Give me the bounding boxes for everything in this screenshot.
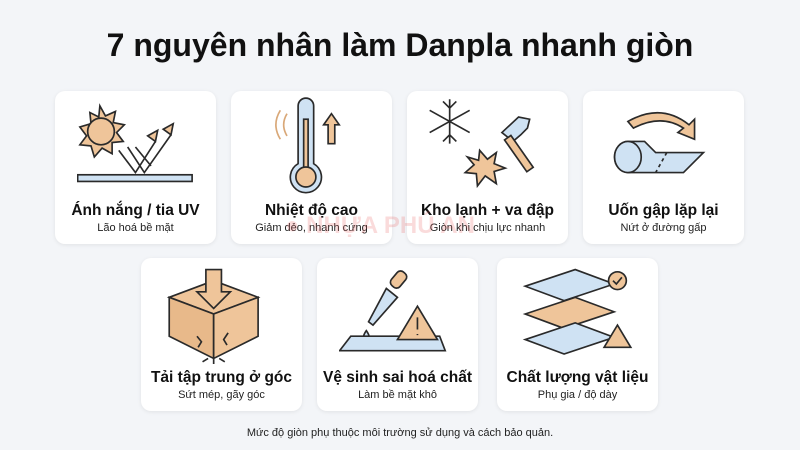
panel: chemicals xyxy=(317,258,478,411)
panel: folding: Nứt ở đường gấp xyxy=(620,222,707,234)
icon: folded sheet xyxy=(614,112,706,174)
panel: cold impact: Kho lạnh + va đập xyxy=(421,202,554,219)
panel: UV: Lão hoá bề mặt xyxy=(97,222,174,234)
panel: material xyxy=(497,258,658,411)
panel: heat: Giảm dẻo, nhanh cứng xyxy=(255,222,368,234)
panel: cold impact: Giòn khi chịu lực nhanh xyxy=(430,222,545,234)
watermark: ● NHỰA PHÚ AN xyxy=(285,212,475,239)
panel: folding: Uốn gập lặp lại xyxy=(608,202,719,219)
panel: UV: Ánh nắng / tia UV xyxy=(71,202,200,219)
icon: snowflake hammer xyxy=(429,99,534,188)
icon: sun uv xyxy=(77,103,193,182)
icon: box with arrow xyxy=(167,268,260,364)
icon: layered sheets xyxy=(522,268,632,355)
panel: corner load: Tải tập trung ở góc xyxy=(151,369,292,386)
panel: heat xyxy=(231,91,392,244)
panel: heat: Nhiệt độ cao xyxy=(265,202,358,219)
panel: folding xyxy=(583,91,744,244)
footer note: Mức độ giòn phụ thuộc môi trường sử dụng và cách bảo quản. xyxy=(247,427,553,439)
panel: chemicals: Vệ sinh sai hoá chất xyxy=(323,369,472,386)
icon: thermometer xyxy=(275,97,341,194)
title: 7 nguyên nhân làm Danpla nhanh giòn xyxy=(107,27,693,63)
panel: chemicals: Làm bề mặt khô xyxy=(358,389,437,401)
panel: corner load xyxy=(141,258,302,411)
panel: corner load: Sứt mép, gãy góc xyxy=(178,389,265,401)
panel: material: Chất lượng vật liệu xyxy=(507,369,648,386)
panel: UV xyxy=(55,91,216,244)
panel: material: Phụ gia / độ dày xyxy=(538,389,617,401)
panel: cold impact xyxy=(407,91,568,244)
icon: dropper warning xyxy=(339,270,446,352)
